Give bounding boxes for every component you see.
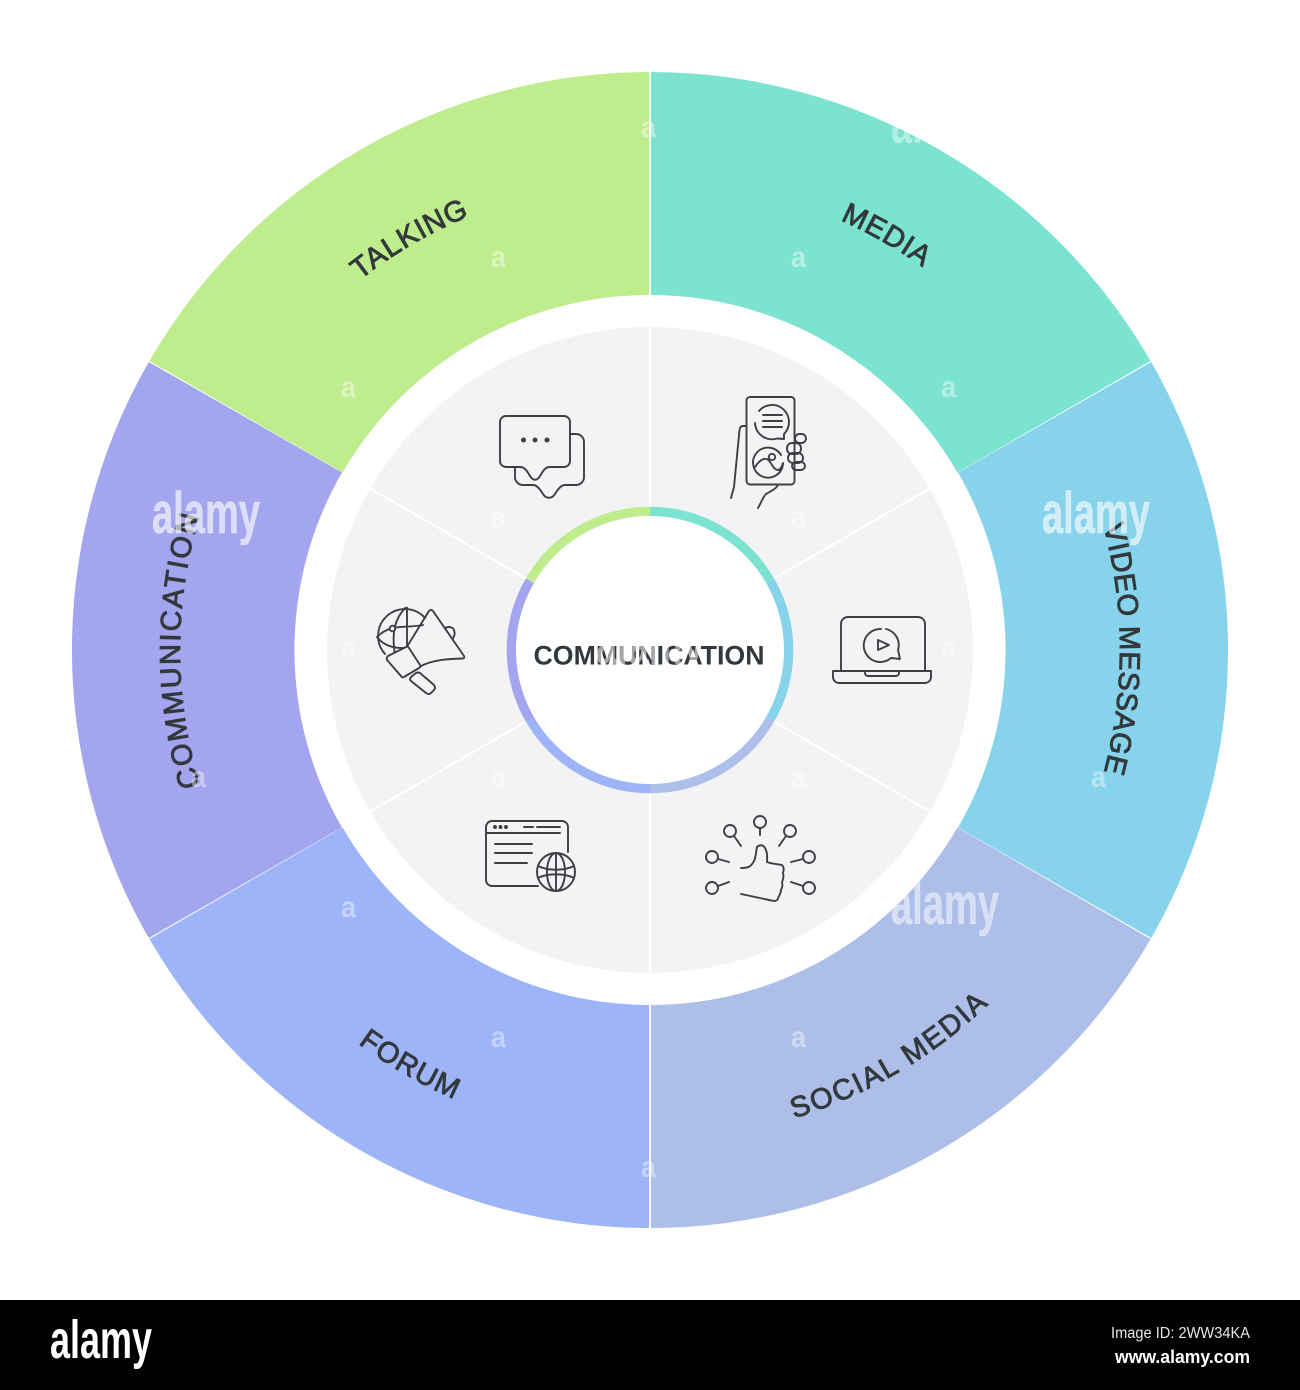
watermarks bbox=[152, 91, 1150, 1184]
watermarks: a bbox=[641, 1151, 656, 1184]
watermarks: a bbox=[791, 241, 806, 274]
icon: thumbs up with network nodes bbox=[706, 816, 815, 901]
inner icon disc bbox=[327, 327, 973, 973]
image id: Image ID: 2WW34KA bbox=[1111, 1325, 1250, 1342]
icon: phone in hand bbox=[731, 397, 806, 508]
watermarks: a bbox=[491, 241, 506, 274]
label: video message: VIDEO MESSAGE bbox=[1104, 520, 1140, 776]
icon: web page with globe bbox=[486, 821, 575, 891]
website: www.alamy.com bbox=[1114, 1347, 1250, 1367]
watermarks: alamy bbox=[1042, 481, 1150, 546]
label: communication: COMMUNICATION bbox=[160, 512, 200, 788]
watermarks: a bbox=[791, 761, 806, 794]
watermarks: a bbox=[341, 891, 356, 924]
watermarks: alamy bbox=[152, 481, 260, 546]
outer ring segments bbox=[72, 72, 1228, 1228]
watermarks: a bbox=[941, 631, 956, 664]
label: media: MEDIA bbox=[842, 202, 928, 268]
icon: globe and megaphone bbox=[377, 608, 464, 694]
label: forum: FORUM bbox=[359, 1028, 461, 1099]
watermarks: a bbox=[341, 631, 356, 664]
watermarks: a bbox=[341, 371, 356, 404]
segment: media bbox=[651, 72, 1151, 472]
segment: social media bbox=[651, 828, 1151, 1228]
footer logo: alamy bbox=[50, 1310, 152, 1370]
icon: laptop with video play bbox=[833, 617, 931, 683]
watermarks: a bbox=[641, 111, 656, 144]
segment: communication bbox=[72, 362, 342, 938]
watermarks: a bbox=[191, 761, 206, 794]
watermarks: alamy bbox=[891, 872, 999, 937]
watermarks: alamy bbox=[596, 612, 704, 677]
segment: video message bbox=[958, 362, 1228, 938]
label: talking: TALKING bbox=[348, 200, 466, 276]
watermarks: a bbox=[491, 1021, 506, 1054]
segment: talking bbox=[149, 72, 649, 472]
footer bar bbox=[0, 1300, 1300, 1390]
segment: forum bbox=[149, 828, 649, 1228]
icon: speech bubbles bbox=[500, 416, 584, 498]
label: social media: SOCIAL MEDIA bbox=[790, 994, 990, 1117]
center title: COMMUNICATION bbox=[534, 640, 764, 670]
watermarks: a bbox=[491, 761, 506, 794]
watermarks: a bbox=[791, 1021, 806, 1054]
watermarks: a bbox=[941, 371, 956, 404]
watermarks: alamy bbox=[891, 91, 999, 156]
center hub ring bbox=[511, 511, 789, 789]
watermarks: a bbox=[1091, 761, 1106, 794]
watermarks: a bbox=[491, 501, 506, 534]
watermarks: a bbox=[791, 501, 806, 534]
